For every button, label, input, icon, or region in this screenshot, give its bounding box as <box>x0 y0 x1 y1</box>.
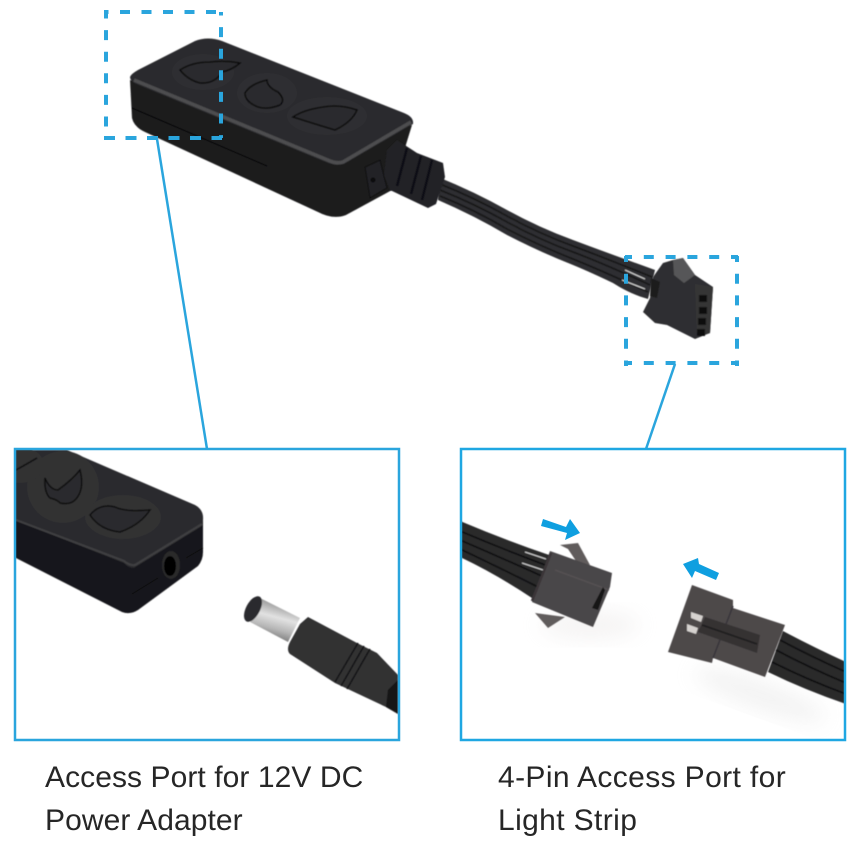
box buttons <box>48 452 82 498</box>
dashed highlight: 4-pin port <box>625 256 738 366</box>
arrow: push left <box>683 558 719 580</box>
connector latch <box>673 258 695 283</box>
dc plug barrel <box>250 597 300 642</box>
dashed highlight: power port <box>104 12 222 138</box>
caption: light strip port <box>498 761 786 837</box>
cable strain relief <box>384 140 445 208</box>
detail panel: power port <box>0 447 399 740</box>
right connector rail <box>698 617 760 653</box>
caption: power port <box>45 761 363 837</box>
left connector clips <box>560 543 590 565</box>
arrow: push right <box>541 519 580 540</box>
caption: light strip port: Light Strip <box>498 804 637 837</box>
caption: power port: Access Port for 12V DC <box>45 761 363 794</box>
leader lines <box>157 139 675 449</box>
power switch <box>365 160 387 198</box>
controller side wall <box>130 80 412 217</box>
right wires <box>768 631 846 704</box>
controller box <box>130 38 413 217</box>
right connector <box>668 585 785 677</box>
left wires <box>460 521 552 600</box>
cable wires <box>438 177 655 299</box>
soft shadows <box>562 618 618 632</box>
caption: light strip port: 4-Pin Access Port for <box>498 761 786 794</box>
left connector <box>532 551 612 627</box>
detail panel: light strip connector <box>460 449 846 740</box>
jack socket <box>162 551 180 579</box>
4-pin connector <box>643 258 713 339</box>
controller buttons <box>172 54 367 135</box>
caption: power port: Power Adapter <box>45 804 243 837</box>
box close-up <box>0 447 398 714</box>
controller top face <box>130 38 413 165</box>
